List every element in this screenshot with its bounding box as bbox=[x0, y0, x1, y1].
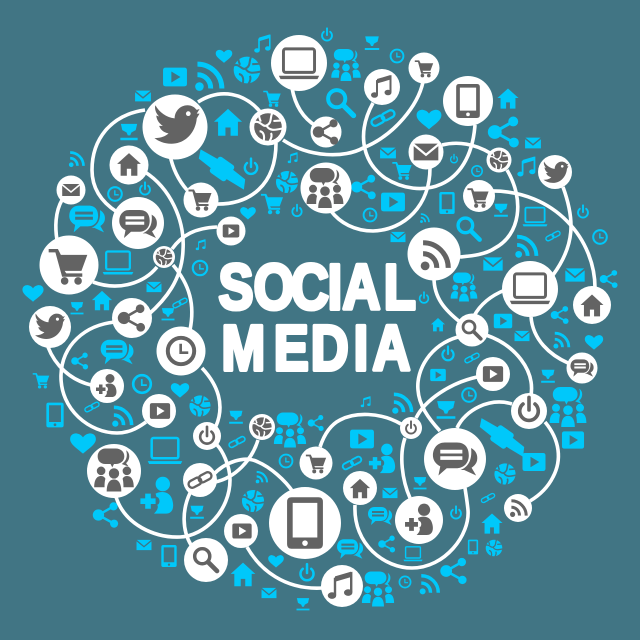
node: globe bbox=[250, 108, 286, 146]
node: twitter bbox=[29, 306, 71, 348]
icon: tray bbox=[120, 124, 138, 140]
node: play bbox=[142, 394, 176, 428]
icon: home bbox=[214, 109, 242, 136]
icon: clock bbox=[193, 261, 207, 275]
icon: search bbox=[328, 90, 354, 116]
icon: share bbox=[600, 270, 618, 288]
icon: tray bbox=[190, 506, 204, 519]
icon: rss bbox=[420, 576, 438, 594]
icon: heart bbox=[417, 110, 441, 129]
node: laptop bbox=[502, 261, 558, 317]
node: add person bbox=[90, 369, 124, 403]
icon: play bbox=[562, 431, 584, 449]
node: tablet bbox=[269, 487, 341, 559]
icon: tray bbox=[494, 204, 508, 217]
icon: share bbox=[378, 536, 395, 552]
icon: clock bbox=[364, 209, 376, 221]
icon: add person bbox=[369, 444, 395, 473]
icon: chat bbox=[69, 206, 105, 232]
node: laptop bbox=[271, 35, 327, 91]
node: home bbox=[110, 146, 148, 184]
icon: mail bbox=[483, 257, 503, 271]
icon: link bbox=[172, 297, 188, 309]
icon: note bbox=[288, 152, 298, 163]
icon: rss bbox=[256, 472, 267, 483]
icon: rss bbox=[112, 407, 132, 427]
node: cart bbox=[184, 182, 218, 218]
icon: mail bbox=[525, 138, 541, 148]
icon: play bbox=[522, 453, 546, 471]
icon: mail bbox=[565, 268, 585, 282]
node: mail bbox=[408, 134, 444, 170]
icon: clock bbox=[108, 187, 122, 201]
icon: cart bbox=[261, 194, 283, 214]
icon: home bbox=[497, 88, 519, 109]
node: cart bbox=[408, 52, 440, 84]
icon: tray bbox=[71, 302, 83, 314]
icon: laptop bbox=[103, 251, 133, 275]
icon: tablet bbox=[46, 403, 64, 427]
icon: mail bbox=[262, 588, 276, 598]
node: rss bbox=[504, 494, 532, 522]
icon: tray bbox=[437, 401, 455, 419]
icon: play bbox=[163, 68, 187, 86]
node: add person bbox=[395, 496, 443, 544]
icon: power bbox=[442, 346, 454, 360]
icon: globe bbox=[494, 463, 516, 485]
icon: clock bbox=[593, 230, 607, 244]
node: play bbox=[216, 216, 246, 246]
icon: cart bbox=[33, 373, 49, 388]
icon: clock bbox=[462, 388, 476, 402]
icon: mail bbox=[137, 540, 151, 550]
icon: mail bbox=[391, 232, 405, 242]
icon: share bbox=[308, 415, 324, 431]
icon: power bbox=[578, 205, 588, 218]
icon: people bbox=[550, 387, 586, 427]
node: globe bbox=[486, 148, 512, 172]
icon: clock bbox=[133, 375, 151, 393]
node: music bbox=[321, 565, 363, 607]
icon: tray bbox=[297, 598, 309, 610]
node: share bbox=[310, 116, 342, 148]
heading line: MEDIA: MEDIA bbox=[222, 313, 410, 384]
node: globe bbox=[249, 414, 275, 440]
icon: link bbox=[84, 401, 100, 413]
icon: power bbox=[451, 506, 461, 519]
icon: play bbox=[350, 430, 374, 448]
node: play bbox=[476, 357, 510, 391]
icon: play bbox=[494, 314, 512, 328]
icon: home bbox=[481, 513, 503, 534]
icon: heart bbox=[216, 50, 232, 63]
icon: rss bbox=[392, 394, 412, 414]
icon: power bbox=[245, 159, 257, 174]
icon: link bbox=[464, 352, 480, 364]
icon: tablet bbox=[439, 192, 455, 214]
title: SOCIAL MEDIA bbox=[219, 252, 416, 384]
icon: tablet bbox=[468, 540, 478, 554]
icon: laptop bbox=[523, 208, 547, 226]
icon: share bbox=[488, 116, 519, 148]
icon: note bbox=[254, 34, 271, 53]
icon: mail bbox=[147, 282, 161, 292]
icon: cart bbox=[392, 162, 412, 180]
icon: globe bbox=[276, 171, 298, 193]
icon: laptop bbox=[403, 547, 423, 561]
icon: globe bbox=[242, 490, 264, 512]
icon: clock bbox=[391, 50, 403, 62]
node: power bbox=[193, 422, 221, 450]
node: power bbox=[400, 417, 422, 439]
icon: rss bbox=[553, 333, 569, 349]
node: search bbox=[184, 538, 228, 582]
icon: power bbox=[451, 154, 457, 163]
icon: add person bbox=[140, 477, 173, 514]
icon: link bbox=[481, 493, 495, 503]
node: cart bbox=[463, 180, 495, 212]
heading line: SOCIAL: SOCIAL bbox=[219, 252, 416, 323]
icon: heart bbox=[171, 383, 189, 398]
node: music bbox=[364, 69, 400, 105]
icon: tray bbox=[365, 36, 379, 50]
node: shopping cart bbox=[40, 236, 98, 294]
icon: link bbox=[545, 230, 561, 242]
icon: clock bbox=[399, 576, 411, 588]
node: people bbox=[300, 162, 352, 214]
icon: share bbox=[93, 502, 118, 528]
icon: link bbox=[342, 456, 362, 470]
node: chat bbox=[566, 352, 598, 384]
node: home bbox=[343, 471, 377, 505]
icon: chat bbox=[368, 507, 392, 525]
node: chat bbox=[112, 197, 164, 249]
node: cart bbox=[300, 446, 332, 480]
icon: power bbox=[140, 182, 150, 195]
icon: heart bbox=[268, 555, 284, 567]
icon: satellite bbox=[193, 145, 252, 194]
connector curves bbox=[48, 82, 595, 588]
icon: cart bbox=[263, 91, 281, 107]
icon: tray bbox=[162, 308, 174, 320]
node: globe small bbox=[153, 246, 175, 268]
icon: home bbox=[92, 291, 112, 310]
icon: rss bbox=[515, 237, 536, 258]
node: people bbox=[87, 444, 141, 498]
icon: mail bbox=[135, 91, 151, 101]
icon: share bbox=[351, 175, 376, 199]
icon: globe bbox=[486, 540, 502, 556]
node: rss bbox=[408, 228, 460, 280]
icon: tray bbox=[541, 370, 555, 383]
icon: power bbox=[300, 564, 314, 580]
icon: link bbox=[228, 436, 246, 448]
icon: power bbox=[292, 205, 302, 216]
node: play bbox=[224, 514, 258, 548]
icon: note bbox=[196, 239, 206, 250]
icon: share bbox=[551, 306, 569, 324]
icon: clock bbox=[472, 166, 482, 176]
node: search bbox=[456, 314, 488, 346]
icon: rss bbox=[420, 214, 429, 223]
node: share bbox=[112, 298, 152, 338]
node: mail bbox=[56, 176, 86, 204]
icon: power bbox=[322, 28, 332, 41]
icon: home bbox=[231, 563, 255, 586]
icon: satellite bbox=[474, 414, 531, 461]
icon: mail bbox=[380, 148, 396, 158]
icon: globe bbox=[234, 57, 260, 83]
node: tablet bbox=[443, 76, 493, 126]
icon: mail bbox=[515, 331, 529, 341]
icon: play bbox=[430, 369, 446, 381]
icon: people bbox=[274, 412, 306, 448]
icon: tray bbox=[414, 477, 426, 489]
icon: rss bbox=[69, 153, 83, 167]
icon: heart bbox=[70, 433, 96, 454]
icon: tray bbox=[229, 411, 243, 424]
icon: heart bbox=[22, 285, 44, 302]
icon: globe bbox=[189, 395, 211, 417]
node: chat bbox=[424, 428, 486, 490]
icon: share bbox=[71, 353, 88, 369]
icon: search bbox=[458, 218, 480, 240]
icon: chat bbox=[337, 539, 363, 559]
icon: people bbox=[331, 49, 361, 81]
node: twitter bbox=[142, 94, 208, 160]
node: link bbox=[183, 463, 217, 497]
icon: heart bbox=[240, 207, 256, 219]
icon: mail bbox=[383, 488, 397, 498]
icon: people bbox=[362, 572, 394, 606]
node: clock bbox=[156, 326, 206, 376]
icon: clock bbox=[280, 455, 292, 467]
icon: note bbox=[361, 396, 371, 407]
node: home bbox=[573, 286, 611, 324]
icon: people bbox=[451, 272, 477, 302]
icon: power bbox=[420, 292, 428, 303]
icon: share bbox=[440, 558, 467, 584]
icon: note bbox=[517, 156, 535, 176]
icon: laptop bbox=[148, 438, 182, 464]
node: power bbox=[511, 393, 547, 429]
icon: chat bbox=[101, 340, 133, 364]
icon: tablet bbox=[161, 545, 177, 567]
icon: rss bbox=[195, 64, 222, 91]
node: twitter bbox=[538, 155, 572, 189]
icon: home bbox=[431, 318, 445, 331]
icon: play bbox=[381, 193, 405, 211]
icon: link bbox=[370, 109, 396, 127]
icon: heart bbox=[585, 335, 603, 350]
